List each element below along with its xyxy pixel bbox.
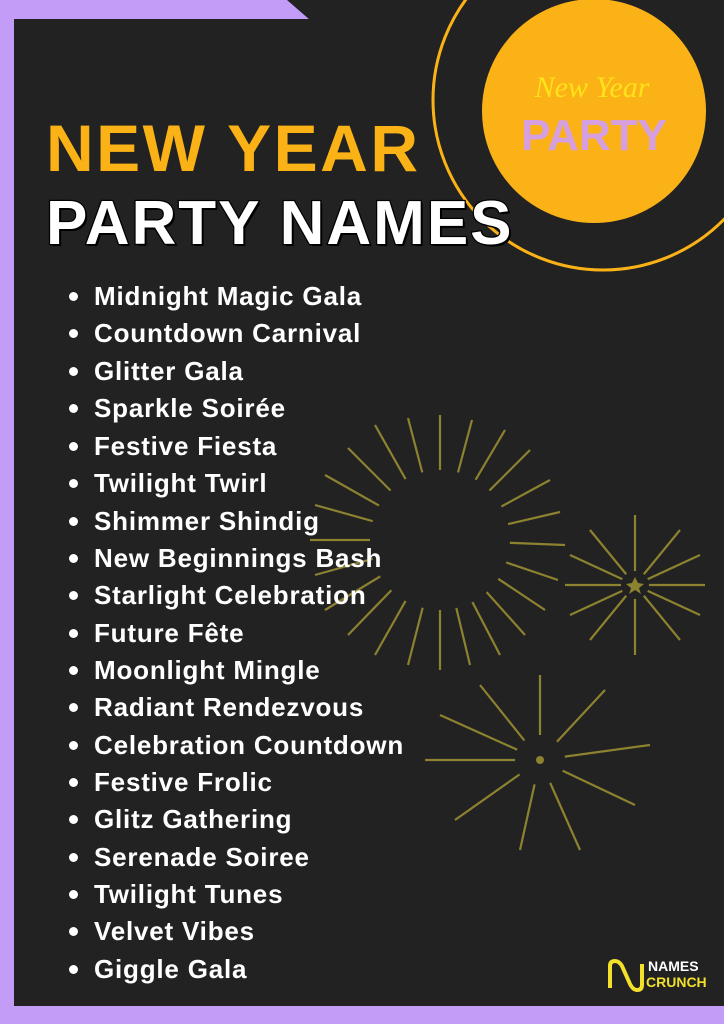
name list: Velvet Vibes <box>94 916 255 946</box>
name list: Twilight Tunes <box>94 879 283 909</box>
logo <box>608 958 707 992</box>
name list: Glitter Gala <box>94 356 244 386</box>
name list: Moonlight Mingle <box>94 655 321 685</box>
firework 1 rays <box>310 415 565 670</box>
name list: Celebration Countdown <box>94 730 404 760</box>
firework 2 <box>565 515 705 655</box>
name list: Festive Frolic <box>94 767 273 797</box>
name list: Giggle Gala <box>94 954 247 984</box>
title line 2: PARTY NAMES <box>46 189 514 258</box>
badge: outer ring <box>432 0 724 272</box>
badge: filled circle <box>482 0 706 223</box>
name list: Countdown Carnival <box>94 318 361 348</box>
name list: Shimmer Shindig <box>94 506 320 536</box>
name list: Twilight Twirl <box>94 468 267 498</box>
name list: Future Fête <box>94 618 244 648</box>
name list: Festive Fiesta <box>94 431 277 461</box>
name list: Midnight Magic Gala <box>94 281 362 311</box>
badge: filled circle: PARTY <box>521 111 667 160</box>
badge: filled circle: New Year <box>534 71 650 104</box>
name list: Sparkle Soirée <box>94 393 286 423</box>
name list: Serenade Soiree <box>94 842 310 872</box>
name list: Starlight Celebration <box>94 580 366 610</box>
name list: New Beginnings Bash <box>94 543 382 573</box>
firework 3 <box>425 675 650 850</box>
name list <box>69 281 404 984</box>
logo: CRUNCH <box>646 974 707 990</box>
title line 1: NEW YEAR <box>46 111 420 185</box>
name list: Glitz Gathering <box>94 804 292 834</box>
name list: Radiant Rendezvous <box>94 692 364 722</box>
logo: NAMES <box>648 958 699 974</box>
